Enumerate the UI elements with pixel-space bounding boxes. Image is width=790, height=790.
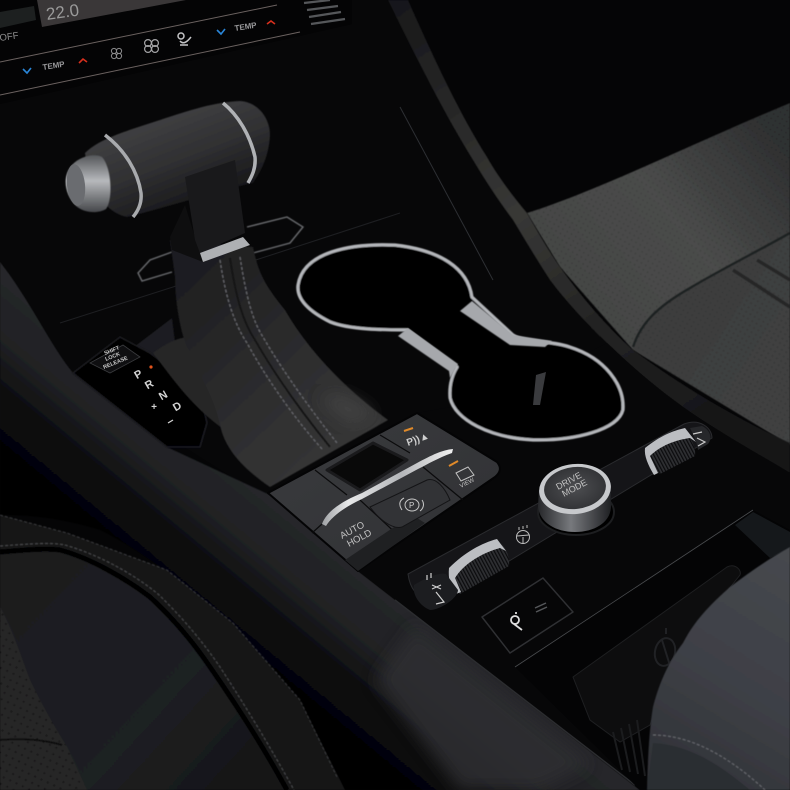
gear lever <box>65 101 270 262</box>
temperature display <box>37 0 186 27</box>
display temperature reading: 22.0 <box>45 1 80 24</box>
upper silver band <box>460 301 552 347</box>
panel light trims <box>0 5 300 95</box>
chrome inlay behind shifter <box>138 217 303 281</box>
lever end cap face <box>65 163 87 207</box>
right front seat cushion <box>647 547 790 790</box>
parking brake letter: P <box>409 501 414 510</box>
lit trim highlight <box>375 625 590 790</box>
shift lock release label <box>103 345 129 371</box>
shift lock release label: SHIFT <box>104 345 121 357</box>
parking brake symbol <box>400 498 423 511</box>
air direction icon <box>178 33 191 45</box>
cup holders <box>298 245 623 440</box>
drive mode label: MODE <box>560 477 589 499</box>
gloss lower edge highlight <box>395 600 635 785</box>
lower silver band <box>398 328 458 378</box>
cup holder pin <box>533 372 546 405</box>
parking sensor indicator <box>404 428 413 431</box>
right temperature down arrow <box>217 29 225 34</box>
lever front chrome band <box>105 135 141 217</box>
view button icon <box>456 467 474 481</box>
tray corner <box>735 512 790 558</box>
lever boot wrap <box>170 205 203 262</box>
auto hold bevel <box>345 515 425 571</box>
right console side trim <box>388 0 790 473</box>
position R: R <box>143 378 156 392</box>
seat and drive control strip <box>408 422 712 610</box>
left seat switch <box>414 539 509 610</box>
center stack gloss surface <box>0 0 720 520</box>
dial knurled body <box>538 488 611 532</box>
shift lock release label: RELEASE <box>103 355 129 371</box>
left switch chrome <box>449 539 506 594</box>
right temperature up arrow <box>267 21 275 24</box>
display left screen <box>0 6 36 28</box>
tray vent <box>613 720 645 776</box>
diagonal stack edge line <box>400 107 493 280</box>
left temp label: TEMP <box>42 60 66 72</box>
position N: N <box>157 389 170 403</box>
shift boot <box>153 240 388 487</box>
wireless charging panel <box>482 578 573 653</box>
dark slot <box>327 443 407 490</box>
pad charging symbol <box>652 628 678 672</box>
indicator dot <box>149 365 153 369</box>
lever handle <box>85 101 270 217</box>
shift lock release panel <box>90 345 140 373</box>
dial cap <box>542 464 608 512</box>
right seat switch <box>645 426 710 475</box>
large fan icon <box>145 40 158 52</box>
auto hold label: AUTO <box>338 520 367 542</box>
gloss reflection by shift indicator <box>130 318 176 360</box>
parking sensor label: P))▲ <box>405 431 431 449</box>
parking brake button <box>370 480 450 527</box>
storage tray <box>515 510 790 790</box>
chrome bar <box>322 449 453 526</box>
button divider lines <box>312 435 463 537</box>
view button label: VIEW <box>459 477 476 490</box>
wireless charging symbol <box>511 612 522 630</box>
left seat icon <box>427 573 444 604</box>
position plus: + <box>151 402 157 413</box>
left temperature down arrow <box>23 68 31 73</box>
climate control panel <box>0 0 352 104</box>
position P: P <box>132 368 145 382</box>
right switch chrome <box>645 428 696 475</box>
left seat button <box>414 574 458 610</box>
gloss horizon line <box>60 213 400 323</box>
tray top edge <box>515 510 753 667</box>
drive mode label <box>554 470 589 499</box>
small fan icon <box>111 48 122 59</box>
right temp label: TEMP <box>234 21 258 33</box>
charging pad <box>573 566 740 742</box>
drive mode label: DRIVE <box>554 470 583 492</box>
left temperature up arrow <box>79 59 87 63</box>
shift lock release label: LOCK <box>105 351 121 363</box>
lever chrome collar <box>200 237 250 262</box>
climate vents <box>304 0 345 24</box>
view indicator <box>449 461 458 466</box>
steering heat icon <box>516 525 530 544</box>
auto hold label: HOLD <box>345 527 374 550</box>
right seat button <box>690 426 710 450</box>
gear position indicator <box>73 337 207 447</box>
right passenger seat <box>527 103 790 445</box>
position minus <box>168 420 173 423</box>
button panel <box>268 413 500 571</box>
lever chrome end cap <box>66 155 111 212</box>
drive mode dial <box>537 460 614 535</box>
left driver seat <box>0 515 345 790</box>
lower gloss console body <box>270 343 790 790</box>
lever rear chrome band <box>223 103 255 183</box>
auto hold label <box>338 520 374 550</box>
charging indicator <box>535 603 547 612</box>
lever stem <box>185 160 245 253</box>
right seat icon <box>693 432 705 446</box>
position D: D <box>171 400 184 414</box>
dial silver ring <box>537 460 613 518</box>
lower left console side trim <box>0 262 640 790</box>
